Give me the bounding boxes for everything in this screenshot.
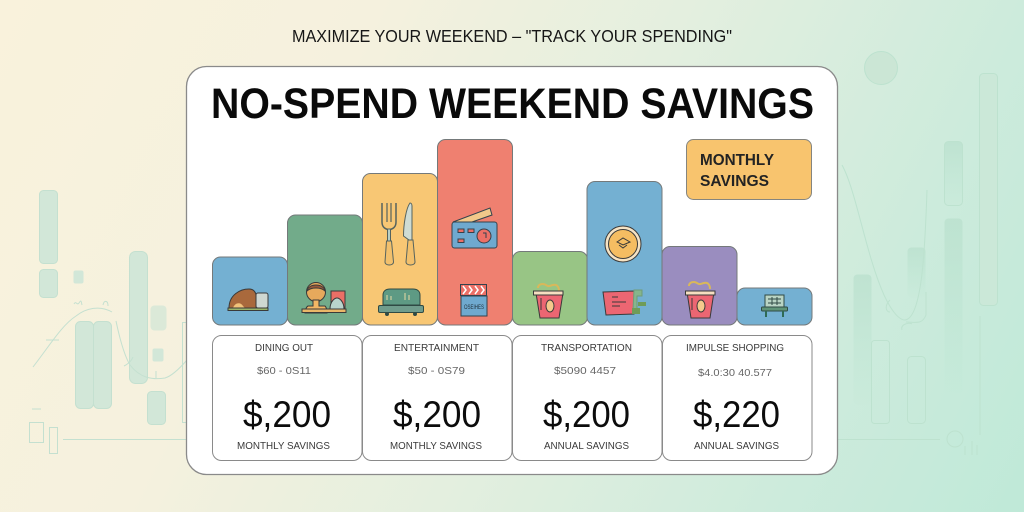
title: NO-SPEND WEEKEND SAVINGS bbox=[211, 81, 814, 128]
icon: receipt and cash bbox=[603, 290, 646, 315]
icon: coin bbox=[605, 226, 641, 262]
icon: clapperboard: OSEIHES bbox=[464, 305, 484, 311]
bar: blue short bbox=[737, 288, 812, 325]
bar: blue tall bbox=[587, 182, 662, 325]
card: transportation bbox=[512, 336, 662, 460]
bar chart bbox=[212, 140, 812, 325]
card: transportation: TRANSPORTATION bbox=[541, 342, 632, 354]
card: transportation: ANNUAL SAVINGS bbox=[544, 440, 629, 452]
icon: clapperboard bbox=[460, 284, 487, 316]
icon: popcorn bucket purple bar bbox=[686, 282, 715, 318]
legend: monthly savings: MONTHLY bbox=[700, 152, 775, 169]
legend: monthly savings bbox=[686, 140, 812, 200]
background decoration: left faded chart bbox=[30, 190, 188, 454]
bar: green bbox=[288, 215, 362, 325]
icon: knife bbox=[404, 203, 415, 265]
icon: radio with clapper top bbox=[452, 208, 497, 248]
bar: light green bbox=[512, 252, 588, 325]
bar: blue dining bbox=[212, 257, 288, 325]
card: entertainment: ENTERTAINMENT bbox=[394, 342, 480, 354]
card: transportation: $5090 4457 bbox=[554, 365, 616, 377]
card: transportation: $,200 bbox=[543, 394, 630, 435]
card: dining out: $60 - 0S11 bbox=[257, 365, 311, 377]
icon: toaster bbox=[378, 289, 424, 316]
card: impulse shopping: $,220 bbox=[693, 394, 780, 435]
top heading: MAXIMIZE YOUR WEEKEND – "TRACK YOUR SPENDING" bbox=[292, 26, 732, 46]
card: impulse shopping bbox=[662, 336, 812, 460]
card: impulse shopping: IMPULSE SHOPPING bbox=[686, 342, 784, 354]
icon: popcorn bucket green bar bbox=[534, 284, 563, 318]
bar: purple bbox=[662, 246, 737, 325]
icon: person at desk with phone bbox=[302, 282, 346, 313]
background decoration: right faded chart bbox=[838, 52, 998, 455]
main panel bbox=[186, 66, 838, 474]
card: entertainment bbox=[362, 336, 512, 460]
icon: food dome and jar bbox=[228, 289, 268, 310]
card: dining out: DINING OUT bbox=[255, 342, 314, 354]
card: impulse shopping: $4.0:30 40.577 bbox=[698, 367, 772, 379]
icon: fork bbox=[382, 203, 396, 265]
bar: red bbox=[438, 140, 512, 325]
card: dining out: $,200 bbox=[243, 394, 331, 435]
bar: yellow bbox=[362, 174, 438, 325]
card: impulse shopping: ANNUAL SAVINGS bbox=[694, 440, 779, 452]
card: entertainment: $50 - 0S79 bbox=[408, 365, 465, 377]
card: dining out bbox=[212, 336, 362, 460]
card: entertainment: $,200 bbox=[393, 394, 481, 435]
legend: monthly savings: SAVINGS bbox=[700, 173, 769, 190]
card: dining out: MONTHLY SAVINGS bbox=[237, 440, 330, 452]
card: entertainment: MONTHLY SAVINGS bbox=[390, 440, 482, 452]
icon: cash register bbox=[762, 295, 788, 317]
